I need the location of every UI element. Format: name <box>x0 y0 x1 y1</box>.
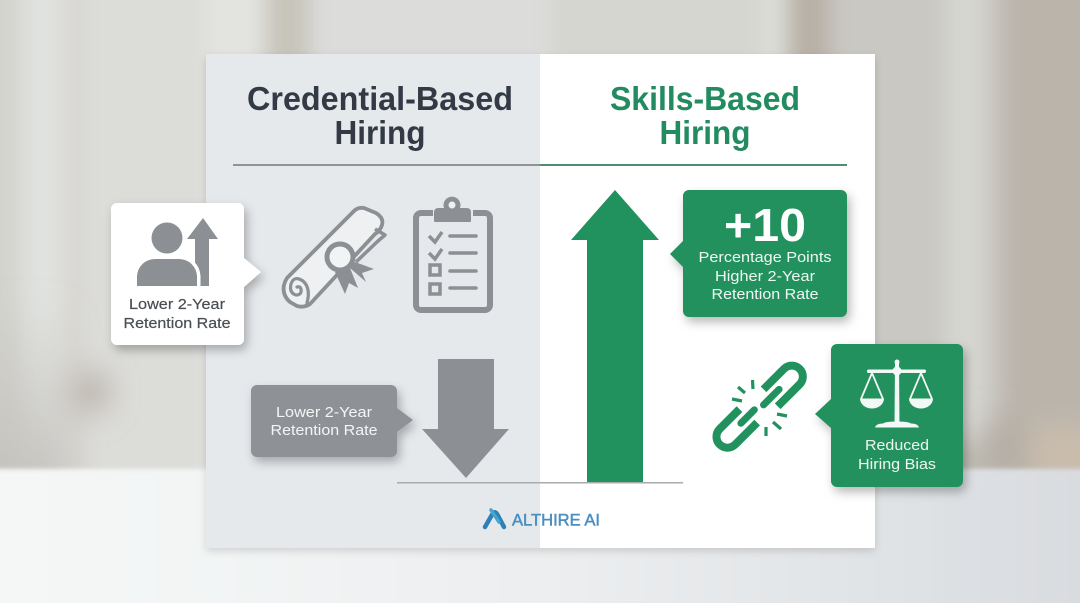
logo: althire ai: ALTHIRE AI <box>512 510 600 530</box>
chart: up arrow <box>571 190 659 483</box>
icon: balance scales <box>860 360 933 428</box>
heading: credential-based hiring <box>247 80 513 151</box>
callout: plus ten percentage points: Retention Rate <box>712 287 818 303</box>
panel: right white side <box>206 54 875 548</box>
heading: skills-based hiring: Skills-Based <box>610 80 800 117</box>
callout: white lower retention rate <box>111 203 261 345</box>
icon: clipboard checklist <box>416 197 490 310</box>
callout: plus ten percentage points <box>670 190 847 317</box>
icon: broken chain link <box>712 359 807 454</box>
callout: reduced hiring bias: Reduced <box>865 437 929 454</box>
heading: skills-based hiring <box>610 80 800 151</box>
chart: down arrow <box>422 359 509 478</box>
heading: credential-based hiring: Hiring <box>334 114 426 151</box>
callout: reduced hiring bias: Hiring Bias <box>858 456 936 473</box>
callout: grey lower retention <box>251 385 413 457</box>
callout: plus ten percentage points: Higher 2-Year <box>715 269 815 285</box>
callout: white lower retention rate: Lower 2-Year <box>129 296 225 313</box>
icon: diploma scroll <box>284 208 385 307</box>
heading: skills-based hiring: Hiring <box>660 114 750 151</box>
callout: white lower retention rate: Retention Rate <box>124 315 230 332</box>
callout: reduced hiring bias <box>815 344 963 487</box>
heading rule right <box>540 164 847 166</box>
chart baseline <box>397 482 683 484</box>
icon: person with up arrow <box>130 218 218 292</box>
heading rule left <box>233 164 540 166</box>
callout: grey lower retention: Retention Rate <box>270 423 378 439</box>
callout: plus ten percentage points: Percentage Points <box>698 250 832 266</box>
panel: left grey side <box>206 54 540 548</box>
callout: grey lower retention: Lower 2-Year <box>276 405 372 421</box>
comparison card <box>206 54 875 548</box>
heading: credential-based hiring: Credential-Based <box>247 80 513 117</box>
callout: plus ten percentage points: +10 <box>724 199 806 251</box>
